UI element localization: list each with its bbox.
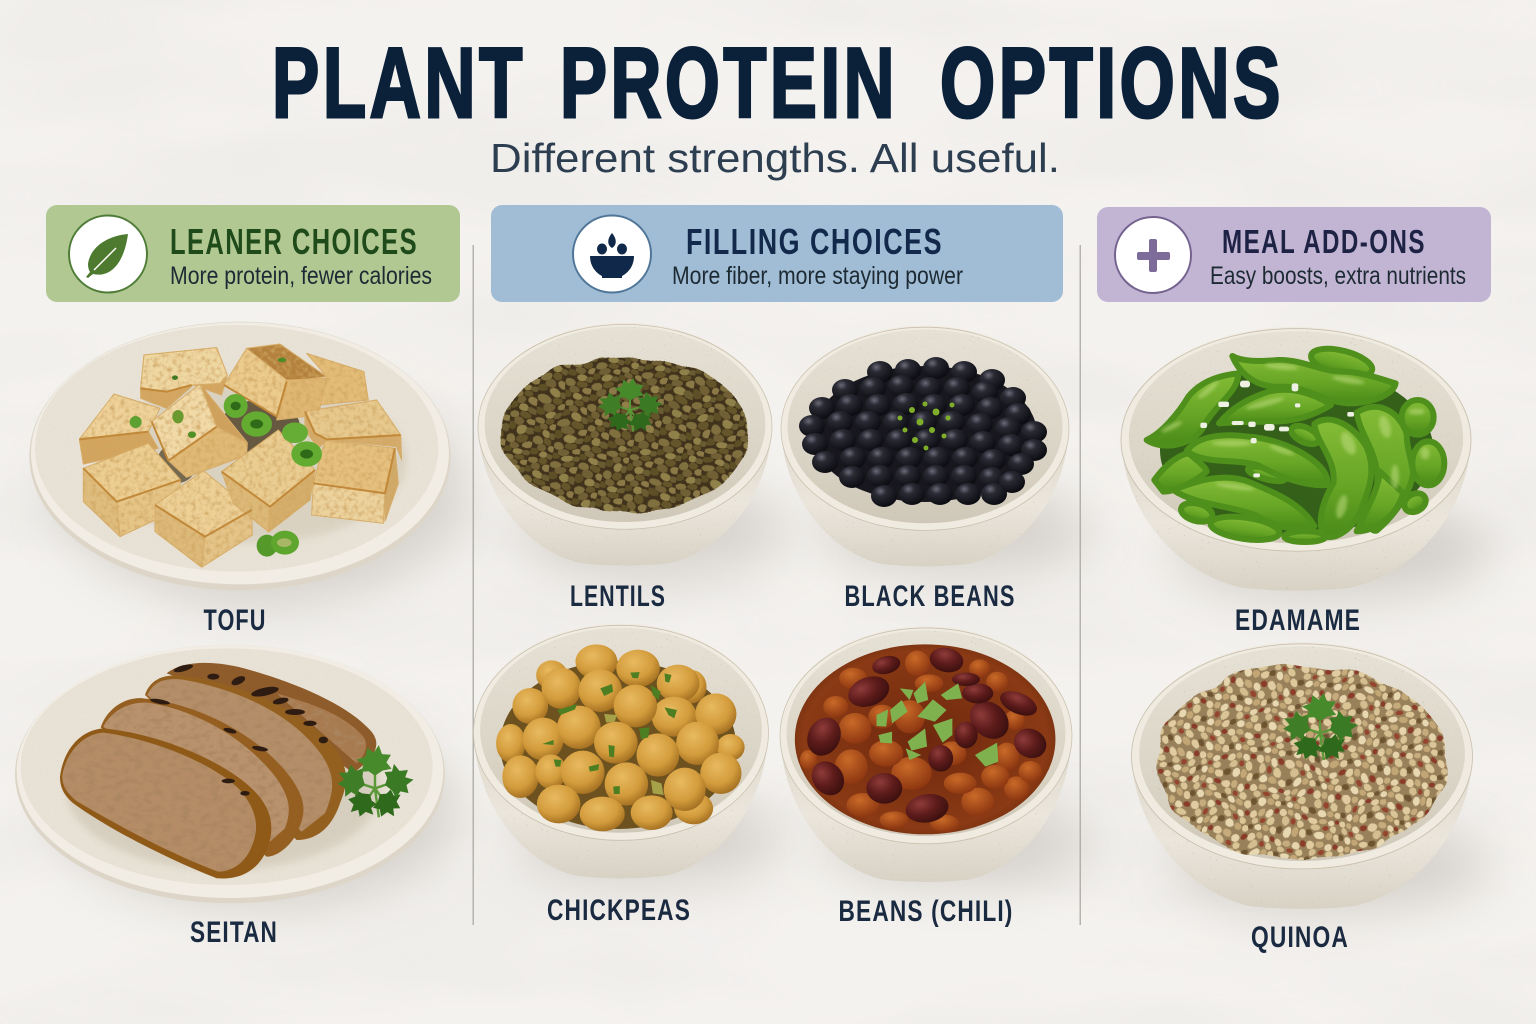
header: filling choices: More fiber, more staying power	[672, 262, 963, 290]
herb flecks	[542, 672, 677, 795]
icon: bowl	[573, 216, 651, 292]
column divider right	[1080, 245, 1081, 925]
seitan slices	[60, 663, 376, 879]
label: edamame: EDAMAME	[1235, 604, 1361, 637]
food: lentils bowl	[478, 323, 790, 576]
food: chili bowl	[780, 626, 1090, 886]
title	[272, 27, 1284, 138]
scallion pieces	[130, 358, 322, 557]
icon: plus	[1115, 217, 1191, 293]
subtitle: Different strengths. All useful.	[490, 135, 1060, 181]
label: black beans: BLACK BEANS	[844, 580, 1016, 613]
food: seitan plate	[15, 645, 458, 908]
food: chickpeas bowl	[474, 624, 785, 884]
parsley garnish	[1278, 693, 1362, 766]
food: edamame bowl	[1121, 327, 1490, 602]
header: meal add-ons: Easy boosts, extra nutrients	[1210, 262, 1466, 290]
kidney beans	[802, 644, 1053, 827]
header: leaner choices: More protein, fewer calories	[170, 262, 432, 290]
title: PLANT	[272, 27, 526, 138]
label: tofu: TOFU	[204, 604, 266, 637]
header: meal add-ons: MEAL ADD-ONS	[1222, 223, 1426, 260]
food: black beans bowl	[781, 326, 1090, 576]
grill marks	[150, 663, 328, 796]
food: quinoa bowl	[1132, 642, 1490, 913]
header: filling choices: FILLING CHOICES	[686, 221, 943, 262]
pod highlights	[1160, 362, 1430, 519]
title: PROTEIN	[560, 27, 898, 138]
sea salt flakes	[1200, 381, 1354, 477]
edamame pods	[1147, 343, 1444, 544]
title: OPTIONS	[940, 27, 1284, 138]
column divider left	[472, 245, 474, 925]
header: filling choices	[491, 205, 1063, 302]
black beans	[799, 357, 1047, 507]
chili chunks	[800, 651, 1042, 832]
label: chickpeas: CHICKPEAS	[547, 894, 691, 927]
label: seitan: SEITAN	[190, 916, 278, 949]
icon: leaf	[69, 216, 147, 292]
label: quinoa: QUINOA	[1251, 921, 1349, 954]
header: meal add-ons	[1097, 207, 1491, 302]
header: leaner choices	[46, 205, 460, 302]
header: leaner choices: LEANER CHOICES	[170, 221, 418, 262]
parsley garnish	[594, 378, 666, 437]
label: beans chili: BEANS (CHILI)	[838, 895, 1014, 928]
herb flecks	[898, 402, 954, 450]
food: tofu plate	[29, 322, 467, 602]
label: lentils: LENTILS	[570, 580, 666, 613]
chickpeas	[496, 644, 745, 831]
herb pieces	[877, 682, 998, 767]
parsley garnish	[332, 745, 417, 824]
